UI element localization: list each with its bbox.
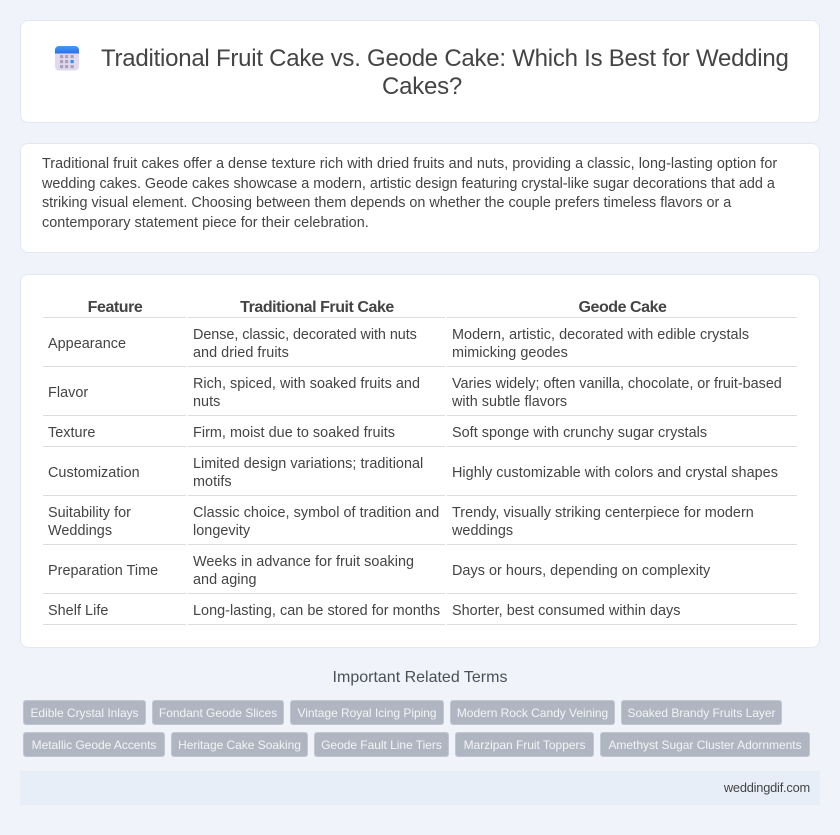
intro paragraph [42, 156, 777, 230]
tag: Modern Rock Candy Veining [457, 706, 608, 720]
row: suitability: longevity [193, 523, 250, 539]
table header: Geode Cake [578, 299, 666, 316]
row: customization [48, 456, 778, 490]
tag: Metallic Geode Accents [32, 738, 156, 752]
tag [23, 732, 165, 757]
tag [290, 700, 444, 725]
footer site name: weddingdif.com [724, 780, 810, 795]
heading: important related terms: Important Related Terms [333, 669, 507, 686]
row: texture: Soft sponge with crunchy sugar crystals [452, 425, 707, 441]
tag: Marzipan Fruit Toppers [464, 738, 585, 752]
row: flavor: with subtle flavors [452, 394, 567, 410]
row: suitability: Suitability for [48, 505, 131, 521]
tag [171, 732, 308, 757]
row: appearance: Modern, artistic, decorated with edible crystals [452, 327, 749, 343]
row: appearance [48, 327, 749, 361]
title: Cakes? [382, 73, 462, 100]
row: customization: Customization [48, 465, 140, 481]
panel: title header [20, 20, 820, 123]
tag: Edible Crystal Inlays [30, 706, 139, 720]
panel: intro text [20, 143, 820, 253]
row: preparation time: Preparation Time [48, 563, 158, 579]
row: customization: Highly customizable with colors and crystal shapes [452, 465, 778, 481]
tag [621, 700, 782, 725]
tag: Fondant Geode Slices [159, 706, 277, 720]
footer bar [20, 771, 820, 805]
row: suitability [48, 505, 754, 539]
tag: Soaked Brandy Fruits Layer [628, 706, 775, 720]
row: flavor: nuts [193, 394, 220, 410]
row: flavor [48, 376, 782, 410]
intro paragraph: contemporary statement piece for their celebration. [42, 214, 369, 230]
row: shelf life: Shorter, best consumed within days [452, 603, 681, 619]
row: texture: Texture [48, 425, 95, 441]
row: preparation time: Days or hours, depending on complexity [452, 563, 710, 579]
tag: Heritage Cake Soaking [178, 738, 301, 752]
intro paragraph: wedding cakes. Geode cakes showcase a modern, artistic design featuring crystal-like sugar decorations that add a [42, 176, 775, 192]
row: appearance: mimicking geodes [452, 345, 568, 361]
table header: Traditional Fruit Cake [240, 299, 394, 316]
row: texture [48, 425, 707, 441]
tag [152, 700, 284, 725]
row: suitability: Classic choice, symbol of tradition and [193, 505, 439, 521]
intro paragraph: Traditional fruit cakes offer a dense texture rich with dried fruits and nuts, providing a classic, long-lasting option for [42, 156, 777, 172]
row: suitability: Trendy, visually striking centerpiece for modern [452, 505, 754, 521]
tag [455, 732, 594, 757]
row: flavor: Flavor [48, 385, 88, 401]
row: appearance: Dense, classic, decorated with nuts [193, 327, 417, 343]
title [101, 45, 789, 100]
row: shelf life: Long-lasting, can be stored for months [193, 603, 440, 619]
title: Traditional Fruit Cake vs. Geode Cake: Which Is Best for Wedding [101, 45, 789, 72]
row: shelf life: Shelf Life [48, 603, 108, 619]
icon: calendar [55, 46, 79, 70]
row: preparation time [48, 554, 710, 588]
panel: comparison table [20, 274, 820, 648]
row: appearance: Appearance [48, 336, 126, 352]
row: texture: Firm, moist due to soaked fruits [193, 425, 395, 441]
tag [23, 700, 146, 725]
tag [450, 700, 615, 725]
tag: Amethyst Sugar Cluster Adornments [608, 738, 802, 752]
row: flavor: Rich, spiced, with soaked fruits and [193, 376, 420, 392]
intro paragraph: striking visual element. Choosing between them depends on whether the couple prefers timeless flavors or a [42, 195, 731, 211]
table header: Feature [88, 299, 142, 316]
row: customization: motifs [193, 474, 232, 490]
row: shelf life [48, 603, 681, 619]
row: customization: Limited design variations; traditional [193, 456, 423, 472]
tag [314, 732, 449, 757]
row: suitability: Weddings [48, 523, 112, 539]
tag list [23, 700, 810, 757]
row: appearance: and dried fruits [193, 345, 289, 361]
row: suitability: weddings [452, 523, 513, 539]
table header [88, 299, 666, 316]
tag: Geode Fault Line Tiers [321, 738, 442, 752]
tag [600, 732, 810, 757]
row: preparation time: Weeks in advance for fruit soaking [193, 554, 414, 570]
tag: Vintage Royal Icing Piping [297, 706, 437, 720]
row: flavor: Varies widely; often vanilla, chocolate, or fruit-based [452, 376, 782, 392]
row: preparation time: and aging [193, 572, 257, 588]
